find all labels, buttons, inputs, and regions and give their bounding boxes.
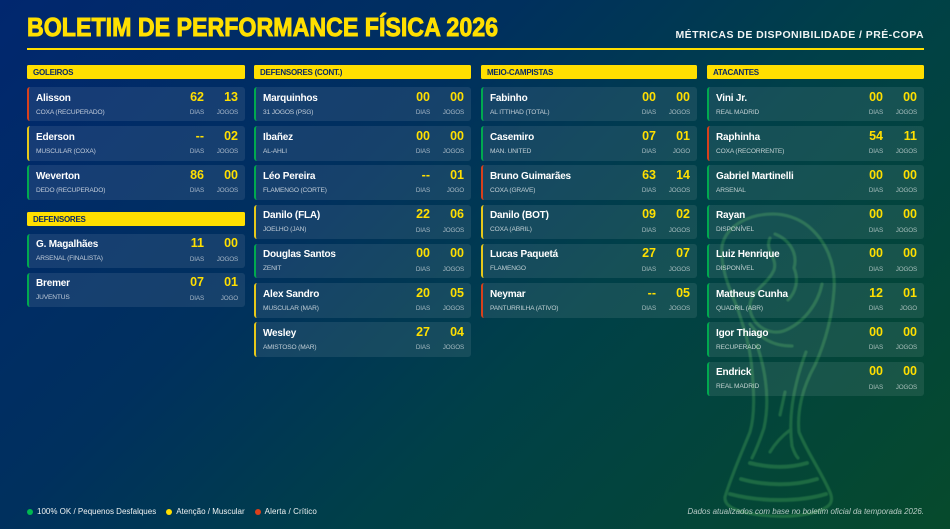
player card: Rayan: DIAS: [869, 227, 883, 234]
player card: Bruno Guimarães: DIAS: [642, 187, 656, 194]
player card: G. Magalhães: ARSENAL (FINALISTA): [36, 255, 103, 262]
player card: Casemiro: 07: [642, 129, 656, 143]
player card: Bremer: JOGO: [221, 295, 238, 302]
panel: atacantes column: [707, 65, 924, 396]
player card: Alisson: COXA (RECUPERADO): [36, 108, 105, 116]
player card: Rayan: 00: [903, 207, 917, 221]
player card: Lucas Paquetá: 07: [676, 246, 690, 260]
player card: Matheus Cunha: Matheus Cunha: [716, 289, 788, 300]
player card: Raphinha: Raphinha: [716, 132, 760, 143]
player card: Vini Jr.: REAL MADRID: [716, 108, 759, 116]
player card: Gabriel Martinelli: Gabriel Martinelli: [716, 171, 794, 182]
player card: Endrick: 00: [903, 364, 917, 378]
player card: Endrick: 00: [869, 364, 883, 378]
player card: Danilo (BOT): 09: [642, 207, 656, 221]
legend: [27, 507, 317, 516]
legend: Alerta / Crítico: [265, 507, 317, 516]
player card: Danilo (FLA): Danilo (FLA): [263, 210, 320, 221]
player card: Endrick: Endrick: [716, 367, 751, 378]
player card: Weverton: JOGOS: [217, 187, 238, 194]
heading: atacantes: [707, 65, 924, 79]
player card: Raphinha: 54: [869, 129, 883, 143]
player card: Marquinhos: DIAS: [416, 109, 430, 116]
player card: Rayan: Rayan: [716, 210, 745, 221]
player card: Alisson: 62: [190, 90, 204, 104]
player card: Ibañez: AL-AHLI: [263, 148, 287, 155]
player card: Léo Pereira: Léo Pereira: [263, 171, 315, 182]
heading: meio-campistas: [481, 65, 697, 79]
player card: Léo Pereira: 01: [450, 168, 464, 182]
player card: Matheus Cunha: JOGO: [900, 305, 917, 312]
player card: Wesley: JOGOS: [443, 344, 464, 351]
player card: Weverton: [27, 165, 245, 200]
player card: Alisson: DIAS: [190, 109, 204, 116]
player card: Douglas Santos: JOGOS: [443, 266, 464, 273]
player card: Douglas Santos: 00: [416, 246, 430, 260]
player card: Igor Thiago: [707, 322, 924, 357]
player card: Weverton: 00: [224, 168, 238, 182]
player card: Matheus Cunha: QUADRIL (ABR): [716, 305, 763, 312]
player card: Alisson: [27, 87, 245, 121]
player card: Vini Jr.: Vini Jr.: [716, 92, 747, 104]
player card: Ibañez: DIAS: [416, 148, 430, 155]
player card: Lucas Paquetá: FLAMENGO: [490, 265, 526, 272]
player card: Ederson: --: [196, 129, 204, 143]
player card: Danilo (BOT): [481, 205, 697, 239]
player card: G. Magalhães: G. Magalhães: [36, 239, 98, 250]
player card: Neymar: --: [648, 286, 656, 300]
player card: Alex Sandro: JOGOS: [443, 305, 464, 312]
player card: Wesley: 27: [416, 325, 430, 339]
player card: Lucas Paquetá: 27: [642, 246, 656, 260]
player card: Bremer: 01: [224, 275, 238, 289]
player card: Alex Sandro: 20: [416, 286, 430, 300]
player card: Danilo (FLA): JOGOS: [443, 227, 464, 234]
panel: meio-campistas column: [481, 65, 697, 318]
player card: Danilo (FLA): JOELHO (JAN): [263, 226, 306, 233]
player card: Léo Pereira: JOGO: [447, 187, 464, 194]
heading: goleiros: [27, 65, 245, 79]
footnote: Dados atualizados com base no boletim oficial da temporada 2026.: [687, 507, 924, 516]
player card: Danilo (BOT): JOGOS: [669, 227, 690, 234]
player card: Vini Jr.: 00: [869, 90, 883, 104]
player card: Rayan: DISPONÍVEL: [716, 226, 754, 233]
player card: Fabinho: AL ITTIHAD (TOTAL): [490, 108, 549, 116]
player card: Léo Pereira: --: [422, 168, 430, 182]
player card: Douglas Santos: ZENIT: [263, 265, 281, 272]
heading: atacantes: ATACANTES: [713, 68, 759, 77]
player card: Danilo (FLA): [254, 205, 471, 239]
player card: Danilo (FLA): 06: [450, 207, 464, 221]
player card: G. Magalhães: JOGOS: [217, 256, 238, 263]
player card: Igor Thiago: 00: [869, 325, 883, 339]
player card: Wesley: 04: [450, 325, 464, 339]
player card: Casemiro: DIAS: [642, 148, 656, 155]
panel: defensores continued column: [254, 65, 471, 357]
player card: Alex Sandro: Alex Sandro: [263, 289, 319, 300]
player card: Rayan: 00: [869, 207, 883, 221]
player card: Danilo (FLA): 22: [416, 207, 430, 221]
player card: Neymar: [481, 283, 697, 318]
player card: Alex Sandro: [254, 283, 471, 318]
player card: Rayan: [707, 205, 924, 239]
player card: Luiz Henrique: DISPONÍVEL: [716, 265, 754, 272]
player card: Weverton: DIAS: [190, 187, 204, 194]
player card: Marquinhos: 00: [416, 90, 430, 104]
player card: Danilo (BOT): DIAS: [642, 227, 656, 234]
player card: Bremer: DIAS: [190, 295, 204, 302]
player card: Lucas Paquetá: [481, 244, 697, 278]
player card: Ederson: Ederson: [36, 132, 75, 143]
player card: Matheus Cunha: DIAS: [869, 305, 883, 312]
player card: Fabinho: Fabinho: [490, 92, 527, 104]
player card: Raphinha: COXA (RECORRENTE): [716, 148, 784, 155]
player card: Bruno Guimarães: JOGOS: [669, 187, 690, 194]
player card: Alex Sandro: MUSCULAR (MAR): [263, 305, 319, 312]
player card: Alisson: Alisson: [36, 92, 71, 104]
panel: goleiros and defensores column: [27, 65, 245, 307]
player card: Luiz Henrique: 00: [903, 246, 917, 260]
player card: Fabinho: 00: [676, 90, 690, 104]
player card: Gabriel Martinelli: DIAS: [869, 187, 883, 194]
legend: Atenção / Muscular: [176, 507, 245, 516]
player card: Igor Thiago: Igor Thiago: [716, 328, 768, 339]
player card: Ibañez: Ibañez: [263, 132, 293, 143]
player card: Gabriel Martinelli: JOGOS: [896, 187, 917, 194]
player card: Endrick: [707, 362, 924, 396]
heading: defensores: DEFENSORES: [33, 215, 86, 224]
player card: Wesley: DIAS: [416, 344, 430, 351]
player card: Marquinhos: 00: [450, 90, 464, 104]
player card: Casemiro: 01: [676, 129, 690, 143]
player card: Gabriel Martinelli: 00: [869, 168, 883, 182]
player card: Igor Thiago: JOGOS: [896, 344, 917, 351]
player card: Bruno Guimarães: Bruno Guimarães: [490, 171, 571, 182]
subtitle: MÉTRICAS DE DISPONIBILIDADE / PRÉ-COPA: [675, 29, 924, 41]
player card: Igor Thiago: RECUPERADO: [716, 344, 761, 351]
player card: Raphinha: DIAS: [869, 148, 883, 155]
player card: Marquinhos: 31 JOGOS (PSG): [263, 108, 313, 116]
player card: Neymar: PANTURRILHA (ATIVO): [490, 305, 558, 312]
player card: Fabinho: [481, 87, 697, 121]
player card: G. Magalhães: DIAS: [190, 256, 204, 263]
player card: G. Magalhães: [27, 234, 245, 268]
player card: Fabinho: 00: [642, 90, 656, 104]
player card: Bruno Guimarães: [481, 165, 697, 200]
player card: Vini Jr.: DIAS: [869, 109, 883, 116]
player card: Raphinha: 11: [904, 129, 917, 143]
player card: Wesley: AMISTOSO (MAR): [263, 344, 316, 351]
player card: Casemiro: [481, 126, 697, 161]
player card: Endrick: DIAS: [869, 384, 883, 391]
player card: Endrick: JOGOS: [896, 384, 917, 391]
player card: Luiz Henrique: DIAS: [869, 266, 883, 273]
player card: G. Magalhães: 00: [224, 236, 238, 250]
heading: defensores cont.: DEFENSORES (CONT.): [260, 68, 342, 77]
player card: Ibañez: [254, 126, 471, 161]
player card: Bruno Guimarães: 14: [676, 168, 690, 182]
player card: Weverton: DEDO (RECUPERADO): [36, 187, 105, 194]
player card: Vini Jr.: 00: [903, 90, 917, 104]
player card: Douglas Santos: Douglas Santos: [263, 249, 336, 260]
player card: Wesley: [254, 322, 471, 357]
player card: Luiz Henrique: Luiz Henrique: [716, 249, 780, 260]
player card: Danilo (BOT): COXA (ABRIL): [490, 226, 532, 233]
heading: goleiros: GOLEIROS: [33, 68, 73, 77]
player card: Bremer: Bremer: [36, 278, 70, 289]
player card: Casemiro: MAN. UNITED: [490, 148, 531, 155]
player card: Fabinho: DIAS: [642, 109, 656, 116]
player card: Luiz Henrique: [707, 244, 924, 278]
title: BOLETIM DE PERFORMANCE FÍSICA 2026: [27, 14, 498, 42]
player card: Ederson: 02: [224, 129, 238, 143]
player card: Ederson: JOGOS: [217, 148, 238, 155]
player card: Ederson: [27, 126, 245, 161]
player card: Fabinho: JOGOS: [669, 109, 690, 116]
player card: Luiz Henrique: 00: [869, 246, 883, 260]
player card: Raphinha: JOGOS: [896, 148, 917, 155]
player card: Matheus Cunha: 12: [869, 286, 883, 300]
player card: Marquinhos: Marquinhos: [263, 92, 318, 104]
player card: Wesley: Wesley: [263, 328, 296, 339]
player card: Gabriel Martinelli: [707, 165, 924, 200]
player card: Douglas Santos: 00: [450, 246, 464, 260]
player card: Bremer: [27, 273, 245, 307]
player card: Endrick: REAL MADRID: [716, 383, 759, 390]
player card: Gabriel Martinelli: ARSENAL: [716, 187, 746, 194]
player card: Léo Pereira: [254, 165, 471, 200]
player card: Bremer: JUVENTUS: [36, 294, 70, 301]
player card: Alisson: 13: [224, 90, 238, 104]
player card: Douglas Santos: [254, 244, 471, 278]
player card: Raphinha: [707, 126, 924, 161]
player card: Igor Thiago: 00: [903, 325, 917, 339]
player card: Matheus Cunha: 01: [903, 286, 917, 300]
player card: Ibañez: 00: [450, 129, 464, 143]
player card: Ibañez: JOGOS: [443, 148, 464, 155]
player card: Weverton: 86: [190, 168, 204, 182]
player card: Lucas Paquetá: Lucas Paquetá: [490, 249, 558, 260]
player card: Casemiro: Casemiro: [490, 132, 534, 143]
player card: Luiz Henrique: JOGOS: [896, 266, 917, 273]
player card: Vini Jr.: [707, 87, 924, 121]
player card: Rayan: JOGOS: [896, 227, 917, 234]
player card: Alex Sandro: 05: [450, 286, 464, 300]
player card: Lucas Paquetá: JOGOS: [669, 266, 690, 273]
player card: Alex Sandro: DIAS: [416, 305, 430, 312]
player card: Casemiro: JOGO: [673, 148, 690, 155]
player card: Léo Pereira: DIAS: [416, 187, 430, 194]
player card: Léo Pereira: FLAMENGO (CORTE): [263, 187, 327, 194]
player card: Bruno Guimarães: 63: [642, 168, 656, 182]
player card: Neymar: DIAS: [642, 305, 656, 312]
player card: Bremer: 07: [190, 275, 204, 289]
player card: Marquinhos: [254, 87, 471, 121]
heading: defensores cont.: [254, 65, 471, 79]
player card: Gabriel Martinelli: 00: [903, 168, 917, 182]
player card: Alisson: JOGOS: [217, 109, 238, 116]
player card: Weverton: Weverton: [36, 171, 80, 182]
player card: Lucas Paquetá: DIAS: [642, 266, 656, 273]
player card: Danilo (BOT): 02: [676, 207, 690, 221]
player card: Danilo (FLA): DIAS: [416, 227, 430, 234]
player card: Ederson: DIAS: [190, 148, 204, 155]
heading: meio-campistas: MEIO-CAMPISTAS: [487, 68, 553, 77]
player card: Matheus Cunha: [707, 283, 924, 318]
player card: Neymar: 05: [676, 286, 690, 300]
player card: Igor Thiago: DIAS: [869, 344, 883, 351]
player card: Ibañez: 00: [416, 129, 430, 143]
player card: Vini Jr.: JOGOS: [896, 109, 917, 116]
heading: defensores: [27, 212, 245, 226]
legend: 100% OK / Pequenos Desfalques: [37, 507, 156, 516]
player card: Marquinhos: JOGOS: [443, 109, 464, 116]
player card: Douglas Santos: DIAS: [416, 266, 430, 273]
player card: Danilo (BOT): Danilo (BOT): [490, 210, 549, 221]
player card: Neymar: JOGOS: [669, 305, 690, 312]
player card: Ederson: MUSCULAR (COXA): [36, 148, 96, 155]
player card: Bruno Guimarães: COXA (GRAVE): [490, 187, 535, 194]
player card: G. Magalhães: 11: [191, 236, 204, 250]
player card: Neymar: Neymar: [490, 289, 526, 300]
